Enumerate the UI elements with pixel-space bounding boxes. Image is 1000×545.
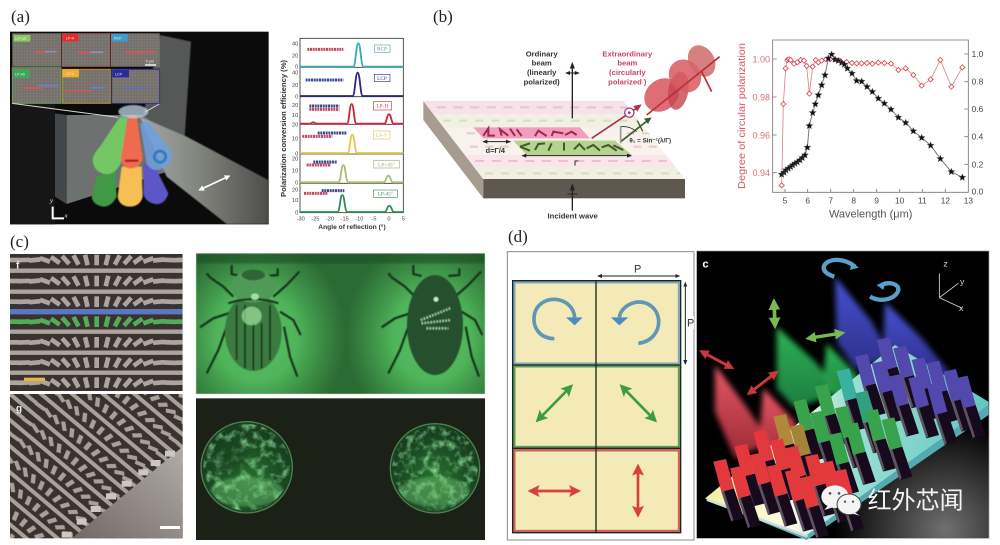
tick labels: 20 [292, 83, 298, 89]
chart: degree of circular polarization vs wavelength: Degree of circular polarization [737, 43, 748, 189]
chart: polarization conversion efficiency: -5 [371, 216, 377, 222]
tick labels: 0 [295, 181, 298, 187]
deflected beam arrows [592, 104, 652, 143]
panel c: SEM micrographs [0, 254, 185, 538]
extraordinary beam text: Extraordinary [602, 50, 653, 59]
x axis: 11 [918, 195, 927, 205]
panel label (a): (a) [11, 7, 30, 26]
tick labels: 0 [295, 65, 298, 71]
ordinary beam text: beam [532, 59, 552, 68]
y axis label of efficiency chart: Polarization conversion efficiency (%) [281, 60, 288, 197]
dotted phase bars [302, 49, 347, 193]
incident wave: Incident wave [548, 212, 598, 221]
legend boxes [373, 45, 399, 198]
period annotations: d=Γ/4 [486, 146, 506, 155]
tick labels: 10 [292, 113, 298, 119]
period annotations: P [687, 318, 694, 330]
green row [514, 366, 679, 447]
period annotations [598, 263, 694, 364]
right axis: 1.0 [972, 49, 984, 59]
tick labels: 40 [292, 71, 298, 77]
xyz axes [939, 259, 965, 313]
inset micrographs: LP-H [66, 36, 75, 40]
x axis: 7 [828, 195, 833, 205]
panel d: unit cell layout [507, 252, 694, 540]
tick labels [292, 41, 298, 216]
inset micrographs: LCP [115, 72, 123, 76]
x axis: 12 [941, 195, 950, 205]
right axis: 0.8 [972, 77, 984, 87]
pink strip [473, 127, 590, 138]
extraordinary beam text: polarized ) [608, 77, 647, 86]
inset micrographs: 5 μm [146, 59, 154, 63]
right axis: 0.2 [972, 159, 984, 169]
inset micrographs: LP+45 [15, 37, 26, 41]
tick labels: 20 [292, 53, 298, 59]
spectra peaks [300, 43, 403, 212]
black star series [782, 54, 962, 177]
x axis: 8 [851, 195, 856, 205]
green nanorods [793, 368, 912, 495]
panel label (d): (d) [508, 227, 528, 246]
SEM top view f [0, 254, 185, 391]
ordinary beam text: Ordinary [526, 50, 558, 59]
inset micrographs: LP-45 [15, 72, 25, 76]
SEM tilted view g: g [16, 404, 22, 415]
extraordinary beam text: (circularly [609, 68, 646, 77]
watermark icon [821, 485, 861, 516]
inset micrographs: RCP [114, 36, 122, 40]
right axis: 0.0 [972, 187, 984, 197]
green strip [513, 141, 632, 155]
SEM top view f: f [16, 261, 20, 272]
orange transition rods [773, 414, 821, 487]
panel d: 3D metasurface rendering [697, 251, 989, 540]
angle formula: θ₁ = Sin⁻¹(λ/Γ) [629, 136, 671, 144]
axes glyph [49, 197, 68, 220]
left coin [200, 420, 293, 513]
right coin [390, 423, 480, 513]
tick labels: 40 [292, 41, 298, 47]
red row [514, 450, 679, 531]
chart: polarization conversion efficiency: 0 [387, 216, 391, 222]
light cones [715, 277, 952, 462]
white polarization arrow [199, 176, 229, 190]
period annotations [483, 142, 631, 167]
chart: degree of circular polarization vs wavelength [737, 40, 984, 221]
left axis: 1.00 [752, 54, 770, 64]
chart: polarization conversion efficiency: -20 [326, 216, 334, 222]
period annotations: Γ [574, 158, 579, 167]
x axis: 9 [874, 195, 879, 205]
chart: polarization conversion efficiency: 5 [402, 216, 405, 222]
xyz axes: z [943, 259, 948, 269]
helix wave [638, 40, 721, 119]
axes glyph: y [49, 197, 53, 204]
SEM tilted view g [10, 394, 183, 538]
tick labels: 0 [295, 151, 298, 157]
blue row [514, 282, 679, 364]
xyz axes: y [960, 276, 965, 286]
tick labels: 20 [292, 103, 298, 109]
right beetle [382, 265, 482, 377]
tick labels: 10 [292, 169, 298, 175]
chart: polarization conversion efficiency: -15 [341, 216, 349, 222]
panel b: metasurface diagram [420, 40, 721, 221]
legend boxes: LP+45° [378, 161, 395, 168]
inset micrographs [12, 33, 160, 103]
plate [705, 345, 988, 540]
panel label (c): (c) [10, 232, 29, 251]
x axis title: Angle of reflection (°) [318, 223, 386, 231]
tick labels: 20 [292, 122, 298, 128]
ordinary beam arrow [566, 63, 579, 118]
tick labels: 10 [292, 198, 298, 204]
legend boxes: LP-V [376, 133, 388, 139]
ordinary beam text: polarized) [524, 77, 560, 86]
period annotations: P [634, 263, 641, 275]
legend boxes: LCP [377, 76, 387, 82]
panel label (b): (b) [433, 7, 453, 26]
ordinary beam text: (linearly [527, 68, 557, 77]
chart: polarization conversion efficiency: -10 [355, 216, 363, 222]
polarization arrows above beams [702, 302, 842, 393]
substrate slab [420, 101, 687, 198]
inset micrographs: LP-V [66, 72, 75, 76]
right axis [972, 49, 984, 197]
chart: polarization conversion efficiency [292, 38, 405, 231]
tick labels: 0 [295, 95, 298, 101]
blue nanorods [855, 337, 986, 445]
watermark text: 红外芯闻 [868, 487, 964, 514]
rotating blue arrows [824, 260, 898, 300]
chart: polarization conversion efficiency: -30 [297, 216, 305, 222]
xyz axes: x [959, 303, 964, 313]
beetle and coin holographic images [196, 253, 486, 540]
axes glyph: x [64, 213, 68, 220]
incident wave [548, 185, 598, 221]
ordinary beam text [524, 50, 560, 86]
left beetle [200, 265, 301, 377]
beetle image [196, 253, 486, 394]
sublabel c: c [702, 259, 709, 271]
panel a: 3D beam scene [10, 32, 269, 224]
extraordinary beam text: beam [617, 59, 638, 68]
right axis: 0.6 [972, 104, 984, 114]
x axis: 6 [805, 195, 810, 205]
tick labels: 0 [295, 210, 298, 216]
coin image [196, 398, 485, 540]
red nanorods [713, 430, 864, 538]
extraordinary beam text [602, 50, 653, 86]
right axis: 0.4 [972, 132, 984, 142]
left axis: 0.96 [752, 130, 770, 140]
x axis: 13 [964, 195, 973, 205]
x axis: 10 [895, 195, 905, 205]
tick labels: 10 [292, 136, 298, 142]
left axis: 0.98 [752, 92, 770, 102]
legend boxes: RCP [377, 47, 387, 53]
chart: polarization conversion efficiency: -25 [311, 216, 319, 222]
chart: degree of circular polarization vs wavelength: Wavelength (μm) [829, 209, 912, 221]
tick labels: 20 [292, 187, 298, 193]
x axis: 5 [783, 195, 788, 205]
left axis [752, 54, 770, 178]
legend boxes: LP-H [376, 104, 388, 110]
legend boxes: LP-45° [378, 191, 393, 198]
x axis [783, 195, 973, 205]
red diamond series [782, 59, 962, 185]
tick labels: 20 [292, 156, 298, 162]
left axis: 0.94 [752, 168, 770, 178]
coloured beams [92, 105, 172, 207]
